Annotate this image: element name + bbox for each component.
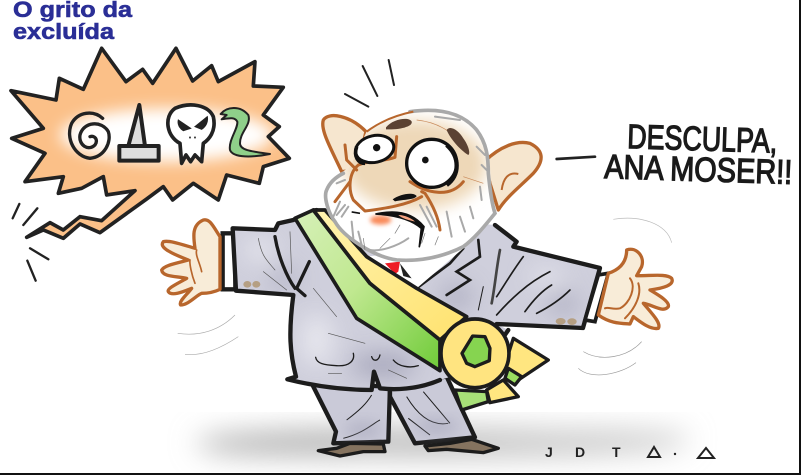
shoes xyxy=(318,439,498,456)
signature: D xyxy=(575,444,585,460)
right cuff xyxy=(585,273,608,322)
speech dash xyxy=(557,157,595,159)
scream marks xyxy=(13,204,48,281)
surprise lines xyxy=(345,60,394,107)
motion lines right xyxy=(578,218,672,375)
title: excluída xyxy=(13,19,115,44)
moustache and mouth xyxy=(352,194,424,247)
signature: J xyxy=(545,444,553,460)
ground shadow xyxy=(195,427,690,457)
motion lines left xyxy=(178,315,238,355)
right sleeve buttons xyxy=(556,318,577,325)
trousers xyxy=(312,377,475,443)
eyebrows xyxy=(386,119,469,155)
presidential sash xyxy=(295,210,548,410)
sash tails xyxy=(455,338,548,410)
icon: skull xyxy=(168,105,214,163)
right hand xyxy=(598,249,672,329)
cheek blush xyxy=(370,215,391,225)
left ear xyxy=(323,116,366,172)
left eye xyxy=(353,132,396,166)
right arm details xyxy=(556,157,672,375)
signature xyxy=(545,444,714,460)
nose and face lines xyxy=(335,137,463,230)
head xyxy=(323,60,541,260)
right eye xyxy=(407,139,457,187)
right ear xyxy=(485,142,541,210)
jacket xyxy=(233,210,600,390)
icon: monument xyxy=(119,105,159,161)
left hand xyxy=(162,220,220,305)
speech burst with symbols xyxy=(11,48,289,281)
face and beard xyxy=(326,110,495,260)
figure: body xyxy=(162,210,600,456)
left shirt cuff xyxy=(223,233,235,289)
beard strokes xyxy=(333,117,488,250)
icon: snake xyxy=(221,108,270,156)
jacket creases xyxy=(258,232,570,378)
sash rosette xyxy=(441,319,509,388)
trouser shading xyxy=(345,420,458,437)
speech text xyxy=(604,118,793,192)
icon: spiral xyxy=(70,113,109,158)
left sleeve buttons xyxy=(243,281,260,288)
signature: T xyxy=(612,444,621,460)
shirt and tie xyxy=(363,248,463,288)
burst shape xyxy=(11,48,289,238)
